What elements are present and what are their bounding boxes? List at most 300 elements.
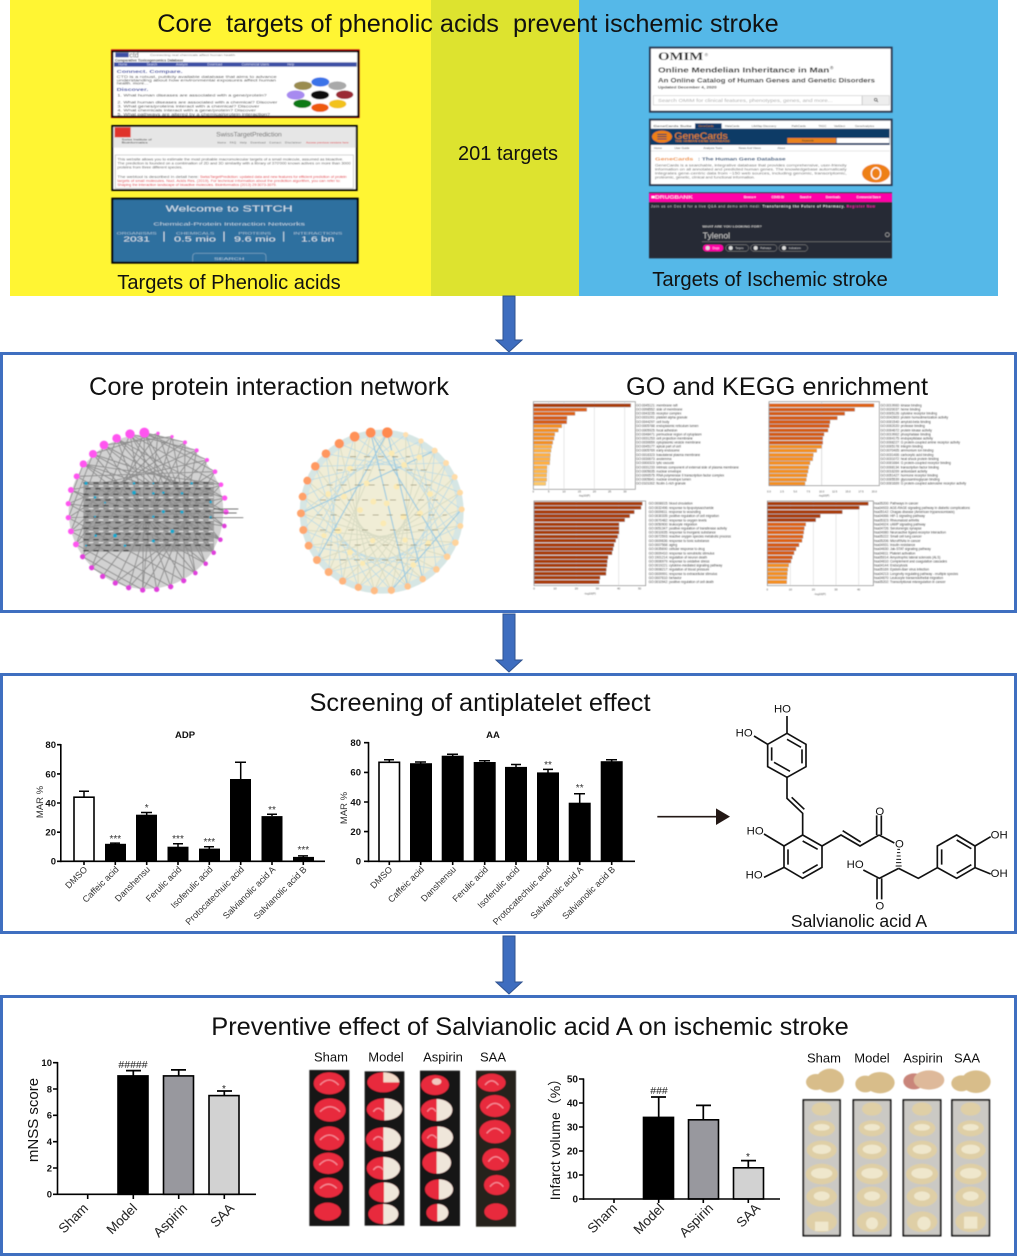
chart: GO cellular component: GO:0030659: cytoplasmic vesicle membrane <box>636 441 701 445</box>
bar chart: AA: 40 <box>350 797 361 808</box>
chart: KEGG pathways: hsa04933: AGE-RAGE signaling pathway in diabetic complications <box>874 506 970 510</box>
chart: GO biological process: GO:0006979: response to oxidative stress <box>649 560 710 564</box>
bar chart: ADP: Salvianolic acid B <box>252 864 309 921</box>
screenshot: SwissTargetPrediction: The webtool is described in detail here: <box>117 175 199 179</box>
chart: KEGG pathways: hsa05014: Amyotrophic lateral sclerosis (ALS) <box>874 555 940 559</box>
bar chart: ADP: 80 <box>45 740 56 751</box>
chart: GO biological process: GO:0009636: response to toxic substance <box>649 539 710 543</box>
bar chart: mNSS score: SAA <box>207 1201 237 1230</box>
chart: KEGG pathways: hsa04726: Serotonergic synapse <box>874 527 922 531</box>
screenshot: GeneCards: About <box>777 146 785 150</box>
bar chart: AA <box>339 730 635 927</box>
screenshot: GeneCards: User Guide <box>674 146 690 150</box>
photos: whole brains and sections: Model <box>854 1050 890 1066</box>
chart: GO biological process: -log10(P) <box>584 592 596 596</box>
bar chart: infarct volume: 10 <box>567 1170 578 1182</box>
bar chart: AA: Salvianolic acid B <box>560 864 617 921</box>
title: Core targets of phenolic acids prevent ischemic stroke <box>157 10 779 38</box>
bar chart: infarct volume: ### <box>650 1085 668 1097</box>
screenshot: GeneCards: News And Views <box>739 146 761 150</box>
screenshot: STITCH: Chemical-Protein Interaction Networks <box>153 221 306 227</box>
chart: GO biological process: GO:0009611: response to wounding <box>649 510 701 514</box>
bar chart: ADP: * <box>145 803 149 814</box>
chemical structure: salvianolic acid A: O <box>875 806 884 818</box>
chart: GO molecular function: GO:0051427: hormone receptor binding <box>880 473 938 477</box>
chart: GO molecular function: 7.5 <box>806 489 811 493</box>
chart: KEGG pathways: hsa05200: Pathways in cancer <box>874 502 919 506</box>
chart: GO cellular component: 10 <box>562 490 566 494</box>
heading: preventive effect: Preventive effect of Salvianolic acid A on ischemic stroke <box>211 1013 849 1041</box>
screenshot: SwissTargetPrediction: Swiss Institute of <box>122 137 152 141</box>
screenshot: GeneCards: GeneCards <box>655 156 694 161</box>
chart: GO molecular function: GO:0008227: G protein-coupled amine receptor activity <box>880 441 960 445</box>
chart: GO molecular function: 12.5 <box>832 489 838 493</box>
screenshot: SwissTargetPrediction: targets of small molecules. Nucl. Acids Res. (2019). For technical information about the prediction algorithm, you can refer to: <box>117 179 341 183</box>
screenshot: SwissTargetPrediction: Access previous versions here <box>306 141 349 145</box>
chart: GO molecular function: GO:0004175: endopeptidase activity <box>880 436 933 440</box>
chart: GO cellular component: GO:0005641: nuclear envelope lumen <box>636 478 691 482</box>
bar chart: mNSS score: 2 <box>47 1163 52 1174</box>
chart: GO cellular component: 0 <box>533 490 535 494</box>
photos: TTC stained sections: SAA <box>480 1050 506 1064</box>
screenshot: GeneCards: GeneCards <box>698 124 714 128</box>
screenshot: GeneCards: information on all annotated and predicted human genes. The knowledgebase automatically <box>655 168 847 172</box>
screenshot: OMIM: Updated December 4, 2020 <box>658 86 717 90</box>
network: orange targets <box>297 427 465 594</box>
screenshot: GeneCards: MalaCards <box>725 124 740 128</box>
chart: GO biological process: GO:0072593: reactive oxygen species metabolic process <box>649 535 731 539</box>
screenshot: STITCH: ORGANISMS <box>117 231 157 236</box>
arrow: to network panel <box>496 296 522 352</box>
screenshot: CTD: Comparative Toxicogenomics Database <box>115 58 183 62</box>
arrow: to chemical structure <box>657 808 730 825</box>
screenshot: GeneCards: VarElect <box>834 124 845 128</box>
bar chart: ADP <box>35 730 325 927</box>
bar chart: AA: Caffeic acid <box>386 864 426 905</box>
chart: KEGG pathways <box>767 501 970 596</box>
bar chart: mNSS score: 0 <box>47 1190 52 1201</box>
bar chart: AA: ** <box>544 760 552 771</box>
screenshot: DrugBank: Drugs <box>713 247 720 250</box>
screenshot: CTD: health. more... <box>117 81 148 86</box>
screenshot: CTD <box>111 49 360 118</box>
screenshot: DrugBank: Search ▾ <box>800 195 812 199</box>
chart: GO biological process: GO:0051347: positive regulation of transferase activity <box>649 527 727 531</box>
chart: KEGG pathways: -log10(P) <box>814 592 826 596</box>
screenshot: OMIM: ® <box>705 52 709 58</box>
chart: GO molecular function <box>767 402 967 498</box>
chart: GO cellular component: GO:0016323: basolateral plasma membrane <box>636 453 700 457</box>
screenshot: DrugBank: ■DRUGBANK <box>651 195 693 200</box>
chart: GO molecular function: 20.0 <box>872 489 877 493</box>
screenshot: CTD: 4. What chemicals interact with a gene/protein? Discover <box>117 108 257 113</box>
arrow: to stroke panel <box>496 936 522 994</box>
chart: GO biological process: GO:0009991: response to extracellular stimulus <box>649 572 718 576</box>
screenshot: GeneCards: TAGC <box>818 124 827 128</box>
chart: GO biological process <box>533 501 731 596</box>
chart: GO cellular component: GO:0045121: membrane raft <box>636 403 678 407</box>
chart: GO molecular function: GO:0001540: amyloid-beta binding <box>880 420 931 424</box>
chart: KEGG pathways: hsa04610: Complement and coagulation cascades <box>874 560 947 564</box>
chart: GO biological process: 20 <box>575 587 578 591</box>
chart: KEGG pathways: 20 <box>812 587 815 591</box>
screenshot: STITCH: 9.6 mio <box>234 236 276 243</box>
bar chart: mNSS score: Model <box>104 1201 140 1237</box>
chart: KEGG pathways: hsa05142: Chagas disease (American trypanosomiasis) <box>874 510 955 514</box>
chart: GO biological process: GO:0030335: positive regulation of cell migration <box>649 514 719 518</box>
chemical structure: salvianolic acid A: OH <box>991 868 1008 880</box>
screenshot: SwissTargetPrediction: SwissTargetPrediction <box>216 131 282 138</box>
arrow: to antiplatelet panel <box>496 614 522 672</box>
screenshot: GeneCards <box>650 120 892 185</box>
chart: GO molecular function: GO:0008134: transcription factor binding <box>880 465 939 469</box>
panel: data sources <box>10 0 998 296</box>
bar chart: AA: 80 <box>350 738 361 749</box>
bar chart: mNSS score: ##### <box>118 1059 148 1071</box>
chart: GO molecular function: GO:0042803: protein homodimerization activity <box>880 416 948 420</box>
chart: GO biological process: GO:0070482: response to oxygen levels <box>649 518 707 522</box>
chart: GO molecular function: GO:0031072: heat shock protein binding <box>880 457 939 461</box>
chart: KEGG pathways: 40 <box>857 587 861 591</box>
screenshot: CTD: understanding about how environmental exposures affect human <box>117 77 276 82</box>
screenshot: CTD: 2. What human diseases are associated with a chemical? Discover <box>117 99 278 104</box>
screenshot: GeneCards: proteomic, genetic, clinical and functional information. <box>655 176 755 180</box>
chart: KEGG pathways: hsa04611: Platelet activation <box>874 551 916 555</box>
chart: GO molecular function: 2.5 <box>780 489 784 493</box>
chart: GO cellular component: GO:0005925: focal adhesion <box>636 428 678 432</box>
screenshot: DrugBank: WHAT ARE YOU LOOKING FOR? <box>702 226 763 229</box>
bar chart: infarct volume: Aspirin <box>676 1201 716 1240</box>
screenshot: CTD: CTD is a robust, publicly available database that aims to advance <box>117 74 278 79</box>
screenshot: SwissTargetPrediction: The prediction is founded on a combination of 2D and 3D similarity with a library of 370'000 known actives on more than 3000 <box>117 161 351 165</box>
bar chart: infarct volume: 30 <box>567 1122 578 1134</box>
chart: GO biological process: GO:1901214: regulation of neuron death <box>649 555 707 559</box>
chart: KEGG pathways: hsa04931: Insulin resistance <box>874 543 915 547</box>
screenshot: GeneCards: Analysis Tools <box>703 146 723 150</box>
bar chart: mNSS score: * <box>222 1084 226 1095</box>
bar chart: ADP: Caffeic acid <box>81 864 121 905</box>
chart: KEGG pathways: hsa05222: Small cell lung cancer <box>874 535 923 539</box>
chart: GO molecular function: GO:0001609: G protein-coupled adenosine receptor activity <box>880 482 967 486</box>
photos: TTC stained sections: Aspirin <box>423 1050 463 1064</box>
screenshot: GeneCards: integrates gene-centric data from ~150 web sources, including genomic, transcriptomic, <box>655 172 847 176</box>
bar chart: mNSS score: mNSS score <box>25 1078 42 1162</box>
screenshot: GeneCards: PathCards <box>792 124 806 128</box>
screenshot: CTD: Download <box>207 63 222 67</box>
screenshot: CTD: 5. What pathways are altered by a chemical/protein interaction? <box>117 112 271 117</box>
screenshot: OMIM: Search OMIM for clinical features, phenotypes, genes, and more... <box>658 98 833 103</box>
bar chart: infarct volume: Sham <box>585 1201 620 1236</box>
chart: KEGG pathways: hsa05169: Epstein-Barr virus infection <box>874 568 929 572</box>
chart: GO biological process: GO:0007610: behavior <box>649 576 682 580</box>
label: targets of ischemic stroke: Targets of Ischemic stroke <box>652 269 888 291</box>
heading: screening: Screening of antiplatelet effect <box>309 689 651 717</box>
chemical structure: salvianolic acid A: O <box>875 900 884 912</box>
bar chart: mNSS score: Sham <box>56 1201 91 1236</box>
screenshot: DrugBank: Tylenol <box>703 231 730 241</box>
chart: GO cellular component: 20 <box>593 490 596 494</box>
chart: GO cellular component: GO:0045177: apical part of cell <box>636 445 681 449</box>
screenshot: CTD: 1. What human diseases are associated with a gene/protein? <box>117 92 268 97</box>
screenshot: STITCH: 1.6 bn <box>301 236 335 243</box>
screenshot: CTD: Search <box>147 63 157 67</box>
bar chart: mNSS score: 8 <box>47 1084 52 1095</box>
bar chart: AA: Ferulic acid <box>451 864 490 904</box>
chart: GO cellular component: GO:0090575: RNA polymerase II transcription factor complex <box>636 473 725 477</box>
bar chart: infarct volume: 50 <box>567 1074 578 1086</box>
screenshot: GeneCards: Keywords <box>802 139 814 143</box>
screenshot: SwissTargetPrediction: This website allows you to estimate the most probable macromolecular targets of a small molecule, assumed as bioactive. <box>117 157 343 161</box>
screenshot: SwissTargetPrediction: Shaping the interaction landscape of bioactive molecules. Bioinformatics (2013) 29:3073-3079. <box>117 183 277 187</box>
chart: GO molecular function: GO:0070405: ammonium ion binding <box>880 449 934 453</box>
chart: GO cellular component: GO:0031233: intrinsic component of external side of plasma membrane <box>636 465 739 469</box>
chemical structure: salvianolic acid A: OH <box>991 830 1008 842</box>
bar chart: AA: Danshensu <box>419 864 458 904</box>
chemical structure: salvianolic acid A: HO <box>736 728 753 740</box>
chart: KEGG pathways: hsa04630: Jak-STAT signaling pathway <box>874 547 931 551</box>
chart: KEGG pathways: hsa05206: MicroRNAs in cancer <box>874 539 922 543</box>
chemical structure: salvianolic acid A: HO <box>747 825 764 837</box>
chart: GO cellular component: GO:0030673: axolemma <box>636 457 672 461</box>
chart: GO biological process: GO:0010035: response to inorganic substance <box>649 531 716 535</box>
chart: KEGG pathways: hsa04213: Longevity regulating pathway - multiple species <box>874 572 959 576</box>
screenshot: SwissTargetPrediction: SwissTargetPrediction: updated data and new features for efficient prediction of protein <box>200 175 347 179</box>
screenshot: CTD: ctd <box>129 53 139 60</box>
screenshot: CTD: Discover. <box>117 87 148 92</box>
chart: KEGG pathways: 30 <box>834 587 838 591</box>
screenshot: DrugBank: Pathways <box>760 247 772 250</box>
chart: GO molecular function: 5.0 <box>793 489 798 493</box>
chart: GO biological process: 30 <box>596 587 599 591</box>
chart: GO molecular function: GO:0005178: integrin binding <box>880 445 923 449</box>
bar chart: ADP: 0 <box>51 857 56 868</box>
screenshot: DrugBank: Browse ▾ <box>744 195 756 199</box>
chart: GO cellular component: GO:0098552: side of membrane <box>636 408 683 412</box>
photos: whole brains and sections: Sham <box>807 1050 841 1066</box>
screenshot: GeneCards: THE HUMAN GENE DATABASE <box>675 139 730 143</box>
photos: whole brains and sections: SAA <box>954 1050 980 1066</box>
screenshot: GeneCards: GeneAnalytics <box>855 124 875 128</box>
screenshot: DrugBank: COVID-19 <box>772 195 784 199</box>
bar chart: AA: AA <box>486 730 500 741</box>
bar chart: ADP: DMSO <box>63 864 89 891</box>
screenshot: CTD: Analyze <box>176 63 188 67</box>
screenshot: CTD: Connect. Compare. <box>117 69 183 74</box>
heading: GO and KEGG enrichment: GO and KEGG enrichment <box>626 373 928 401</box>
screenshot: SwissTargetPrediction: Home FAQ Help Download Contact Disclaimer <box>217 141 301 145</box>
screenshot: OMIM: ® <box>830 64 834 70</box>
chart: GO cellular component: -log10(P) <box>579 494 590 498</box>
chart: GO molecular function: GO:0002020: protease binding <box>880 424 925 428</box>
chemical structure: salvianolic acid A <box>736 703 1008 912</box>
chart: GO biological process: 40 <box>617 587 621 591</box>
chart: GO biological process: GO:0008015: blood circulation <box>649 502 693 506</box>
photos: TTC stained sections: Sham <box>314 1050 348 1064</box>
chart: GO cellular component: 30 <box>623 490 627 494</box>
chart: KEGG pathways: hsa05202: Transcriptional misregulation in cancer <box>874 580 946 584</box>
chart: GO molecular function: GO:0019900: kinase binding <box>880 403 922 407</box>
chart: GO cellular component: GO:0000323: lytic vacuole <box>636 461 674 465</box>
chart: GO biological process: GO:0008217: regulation of blood pressure <box>649 568 710 572</box>
screenshot: STITCH <box>112 199 358 263</box>
panel: screening of antiplatelet effect <box>2 674 1016 932</box>
screenshot: DrugBank: Commercial Data ▾ <box>857 195 881 199</box>
screenshot: CTD: 3. What genes/proteins interact with a chemical? Discover <box>117 104 260 109</box>
photos: whole brains and sections: Aspirin <box>903 1050 943 1066</box>
screenshot: STITCH: SEARCH <box>214 256 245 261</box>
screenshot: OMIM: OMIM <box>658 49 703 63</box>
bar chart: mNSS score <box>25 1058 256 1240</box>
chart: GO molecular function: GO:0004672: protein kinase activity <box>880 428 932 432</box>
chart: GO molecular function: 15.0 <box>845 489 851 493</box>
screenshot: SwissTargetPrediction: proteins from three different species. <box>117 165 183 169</box>
bar chart: AA: 0 <box>356 857 361 868</box>
chart: KEGG pathways: hsa04024: cAMP signaling pathway <box>874 522 926 526</box>
photos: TTC stained sections <box>309 1050 516 1227</box>
chart: GO molecular function: 10.0 <box>819 489 825 493</box>
screenshot: GeneCards: LifeMap Discovery <box>752 124 777 128</box>
bar chart: AA: Salvianolic acid A <box>529 864 585 921</box>
bar chart: ADP: *** <box>172 834 184 845</box>
chart: GO molecular function: GO:0031406: carboxylic acid binding <box>880 453 934 457</box>
screenshot: OMIM: Online Mendelian Inheritance in Man <box>658 65 830 74</box>
chart: GO molecular function: GO:0001664: G protein-coupled receptor binding <box>880 461 951 465</box>
chart: GO biological process: GO:0032496: response to lipopolysaccharide <box>649 506 714 510</box>
chart: GO molecular function: GO:0005539: glycosaminoglycan binding <box>880 478 940 482</box>
chemical structure: salvianolic acid A: HO <box>774 703 791 715</box>
network: magenta targets <box>66 428 243 593</box>
chart: GO biological process: GO:0007568: aging <box>649 543 677 547</box>
chart: GO cellular component: GO:0044297: cell body <box>636 420 670 424</box>
bar chart: AA: DMSO <box>368 864 394 891</box>
chemical structure: salvianolic acid A: HO <box>847 859 864 871</box>
bar chart: AA: Isoferulic acid <box>475 864 521 910</box>
chart: GO cellular component: GO:0048471: perinuclear region of cytoplasm <box>636 432 702 436</box>
screenshot: STITCH: INTERACTIONS <box>293 231 343 236</box>
bar chart: ADP: *** <box>203 837 215 848</box>
chart: GO biological process: GO:0050900: leukocyte migration <box>649 522 697 526</box>
bar chart: mNSS score: 10 <box>41 1058 52 1069</box>
screenshot: CTD: Connecting real chemicals affect human health <box>150 53 235 57</box>
screenshot: STITCH: PROTEINS <box>238 231 272 236</box>
screenshot: DrugBank: Join us on Dec 8 for a live Q&A and demo with medi: Transforming the Future of Pharmacy. Register Now <box>651 205 875 209</box>
screenshot: STITCH: 2031 <box>123 236 150 243</box>
chart: GO cellular component: GO:0005769: early endosome <box>636 449 680 453</box>
bar chart: mNSS score: Aspirin <box>150 1201 190 1240</box>
chart: GO biological process: 0 <box>533 587 535 591</box>
bar chart: ADP: 40 <box>45 798 56 809</box>
chart: GO cellular component: GO:0005635: nuclear envelope <box>636 469 681 473</box>
screenshot: GeneCards: Home <box>654 146 662 150</box>
screenshot: STITCH: CHEMICALS <box>176 231 215 236</box>
chart: GO biological process: 50 <box>638 587 642 591</box>
bar chart: AA: 20 <box>350 827 361 838</box>
bar chart: ADP: Salvianolic acid A <box>221 864 277 921</box>
bar chart: ADP: 20 <box>45 828 56 839</box>
chart: KEGG pathways: hsa04670: Leukocyte transendothelial migration <box>874 576 943 580</box>
bar chart: ADP: Isoferulic acid <box>169 864 215 910</box>
bar chart: ADP: *** <box>109 834 121 845</box>
chart: GO molecular function: 17.5 <box>858 489 864 493</box>
screenshot: CTD: Home <box>118 63 127 67</box>
bar chart: AA: ** <box>576 783 584 794</box>
chart: GO cellular component <box>533 402 739 498</box>
chart: GO biological process: GO:0010942: positive regulation of cell death <box>649 580 714 584</box>
chart: KEGG pathways: 0 <box>767 587 769 591</box>
chart: GO molecular function: GO:0016209: antioxidant activity <box>880 469 928 473</box>
panel: networks and enrichment <box>2 354 1016 612</box>
chart: KEGG pathways: hsa04066: HIF-1 signaling pathway <box>874 514 925 518</box>
bar chart: ADP: 60 <box>45 769 56 780</box>
chart: KEGG pathways: hsa05323: Rheumatoid arthritis <box>874 518 920 522</box>
chart: GO cellular component: GO:0101002: ficolin-1-rich granule <box>636 482 686 486</box>
chart: GO cellular component: GO:0005788: endoplasmic reticulum lumen <box>636 424 699 428</box>
chart: GO cellular component: GO:0031091: platelet alpha granule <box>636 416 688 420</box>
bar chart: infarct volume: Infarct volume（%） <box>547 1072 563 1200</box>
screenshot: GeneCards: GeneCards Suite <box>653 124 692 128</box>
bar chart: ADP: Danshensu <box>113 864 152 904</box>
chart: GO molecular function: GO:0005126: cytokine receptor binding <box>880 412 937 416</box>
bar chart: infarct volume: 20 <box>567 1146 578 1158</box>
screenshot: GeneCards: : The Human Gene Database <box>698 156 786 161</box>
screenshot: OMIM <box>650 48 892 112</box>
screenshot: CTD: Commercial Users <box>242 63 269 67</box>
chart: GO cellular component: 15 <box>578 490 581 494</box>
bar chart: ADP: Ferulic acid <box>144 864 183 904</box>
bar chart: AA: Protocatechuic acid <box>491 864 553 927</box>
chart: GO biological process: GO:0035690: cellular response to drug <box>649 547 705 551</box>
label: salvianolic acid A: Salvianolic acid A <box>791 911 927 931</box>
bar chart: mNSS score: 4 <box>47 1137 53 1148</box>
screenshot: SwissTargetPrediction: Bioinformatics <box>122 140 149 144</box>
screenshot: STITCH: Welcome to STITCH <box>166 204 293 213</box>
chemical structure: salvianolic acid A: O <box>895 838 904 850</box>
label: targets of phenolic acids: Targets of Phenolic acids <box>117 272 341 294</box>
chart: GO cellular component: GO:0031253: cell projection membrane <box>636 436 693 440</box>
bar chart: ADP: Protocatechuic acid <box>184 864 246 927</box>
screenshot: DrugBank <box>649 192 892 258</box>
screenshot: DrugBank: Downloads <box>826 195 841 199</box>
screenshot: DrugBank: Indications <box>789 247 802 250</box>
chart: GO molecular function: 0.0 <box>767 489 771 493</box>
bar chart: infarct volume <box>547 1072 780 1240</box>
label: 201 targets: 201 targets <box>458 143 558 165</box>
bar chart: mNSS score: 6 <box>47 1111 52 1122</box>
bar chart: AA: MAR % <box>339 791 350 824</box>
chart: GO molecular function: GO:0019902: phosphatase binding <box>880 432 931 436</box>
screenshot: CTD: Help <box>287 63 294 67</box>
chart: GO biological process: GO:0009410: response to xenobiotic stimulus <box>649 551 715 555</box>
photos: whole brains and sections <box>803 1050 991 1236</box>
screenshot: SwissTargetPrediction <box>112 126 357 190</box>
chart: GO molecular function: -log10(P) <box>819 494 830 498</box>
bar chart: infarct volume: * <box>746 1152 750 1163</box>
chart: GO biological process: GO:0019221: cytokine-mediated signaling pathway <box>649 564 723 568</box>
bar chart: infarct volume: 0 <box>572 1194 578 1206</box>
screenshot: OMIM: An Online Catalog of Human Genes and Genetic Disorders <box>658 78 876 85</box>
bar chart: ADP: *** <box>297 845 309 856</box>
bar chart: infarct volume: SAA <box>733 1201 763 1230</box>
chemical structure: salvianolic acid A: HO <box>746 870 763 882</box>
bar chart: infarct volume: 40 <box>567 1098 578 1110</box>
bar chart: ADP: MAR % <box>35 785 46 818</box>
chart: KEGG pathways: 10 <box>789 587 792 591</box>
heading: core protein interaction network: Core protein interaction network <box>89 373 449 401</box>
chart: KEGG pathways: hsa04080: Neuroactive ligand-receptor interaction <box>874 531 946 535</box>
screenshot: GeneCards: GeneCards <box>674 131 728 141</box>
screenshot: DrugBank: Targets <box>735 247 744 250</box>
bar chart: infarct volume: Model <box>631 1201 667 1237</box>
